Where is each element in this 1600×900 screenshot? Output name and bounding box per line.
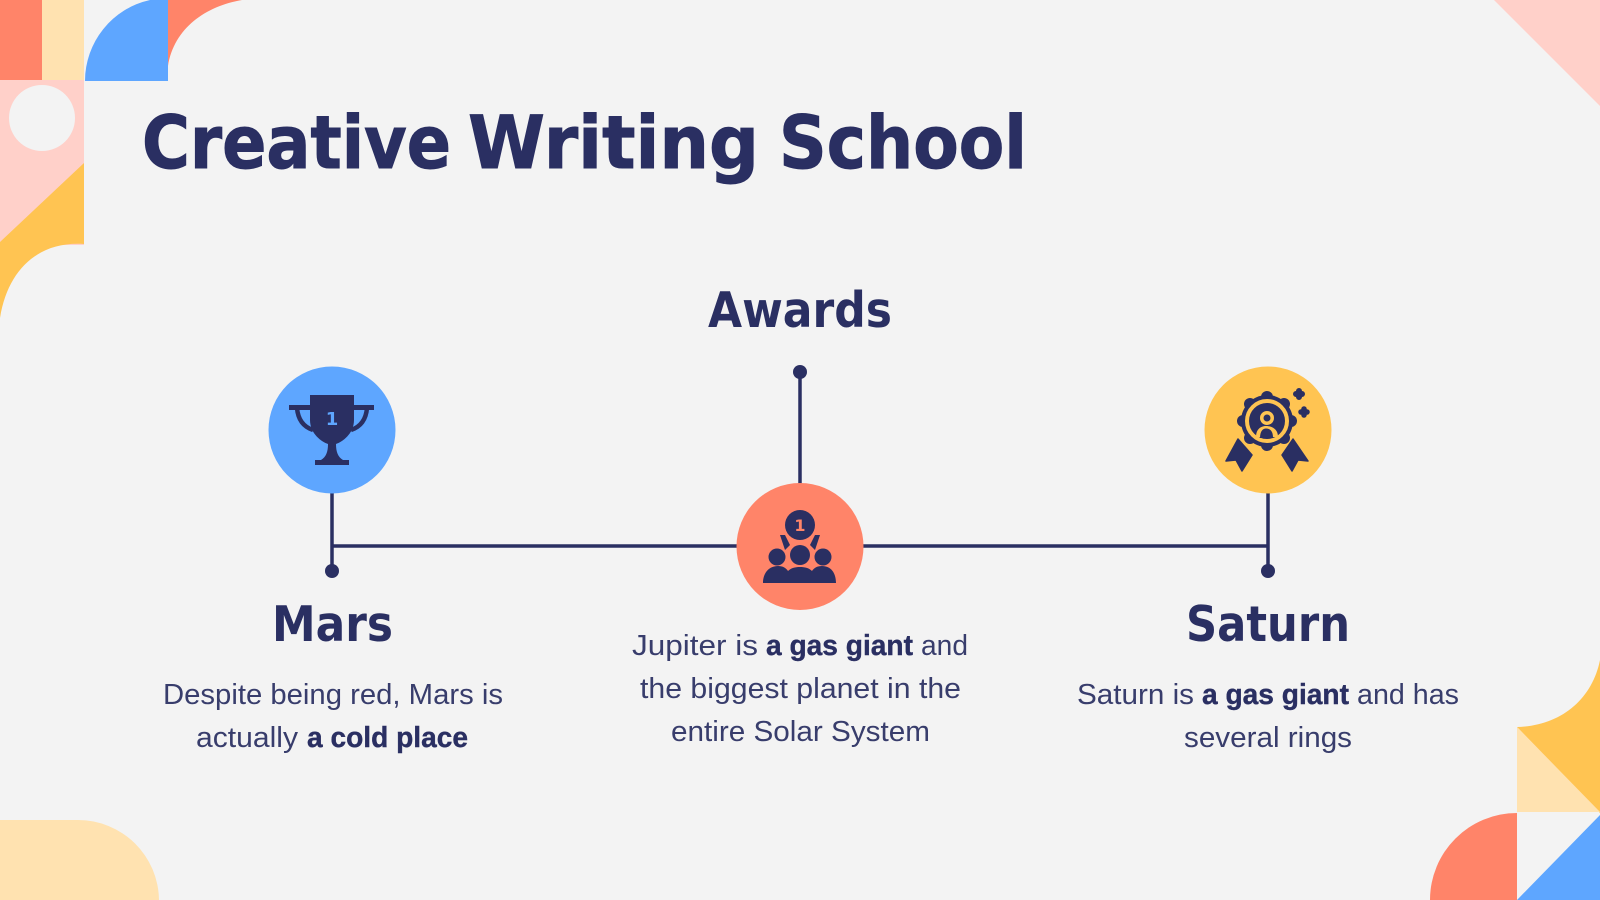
description: Mars: actually <box>196 722 299 754</box>
heading: Awards: Awards <box>708 282 892 339</box>
description: Mars: a cold place <box>307 722 468 754</box>
heading: Mars: Mars <box>272 596 393 653</box>
connector: timeline <box>325 365 1275 578</box>
text block: Saturn <box>1077 596 1459 754</box>
description: Mars: Despite being red, Mars is <box>163 679 503 711</box>
title: Writing <box>468 101 759 186</box>
description: Jupiter: and <box>921 630 968 662</box>
description: Jupiter: the biggest planet in the <box>640 673 961 705</box>
description: Jupiter: a gas giant <box>766 630 913 662</box>
description: Saturn <box>1077 679 1459 754</box>
description: Jupiter <box>632 630 968 748</box>
description: Saturn: Saturn is <box>1077 679 1194 711</box>
icon: rosette badge <box>1204 366 1332 494</box>
description: Jupiter: Jupiter is <box>632 630 758 662</box>
decoration: bottom-left rounded shape <box>0 820 159 900</box>
title <box>142 101 1027 186</box>
description: Saturn: several rings <box>1184 722 1352 754</box>
description: Saturn: and has <box>1357 679 1459 711</box>
text block: Mars <box>163 596 503 754</box>
icon: audience and medal <box>736 483 864 610</box>
decoration: top-left shapes <box>0 0 242 318</box>
heading: Saturn: Saturn <box>1186 596 1350 653</box>
icon: audience and medal: 1 <box>794 516 806 535</box>
description: Jupiter: entire Solar System <box>671 716 930 748</box>
icon: trophy <box>268 366 396 494</box>
title: Creative <box>142 101 451 186</box>
decoration: bottom-right shapes <box>1430 660 1600 900</box>
decoration: top-right triangle <box>1494 0 1600 106</box>
icon: trophy: 1 <box>326 409 338 430</box>
description: Mars <box>163 679 503 754</box>
description: Saturn: a gas giant <box>1202 679 1349 711</box>
title: School <box>779 101 1027 186</box>
